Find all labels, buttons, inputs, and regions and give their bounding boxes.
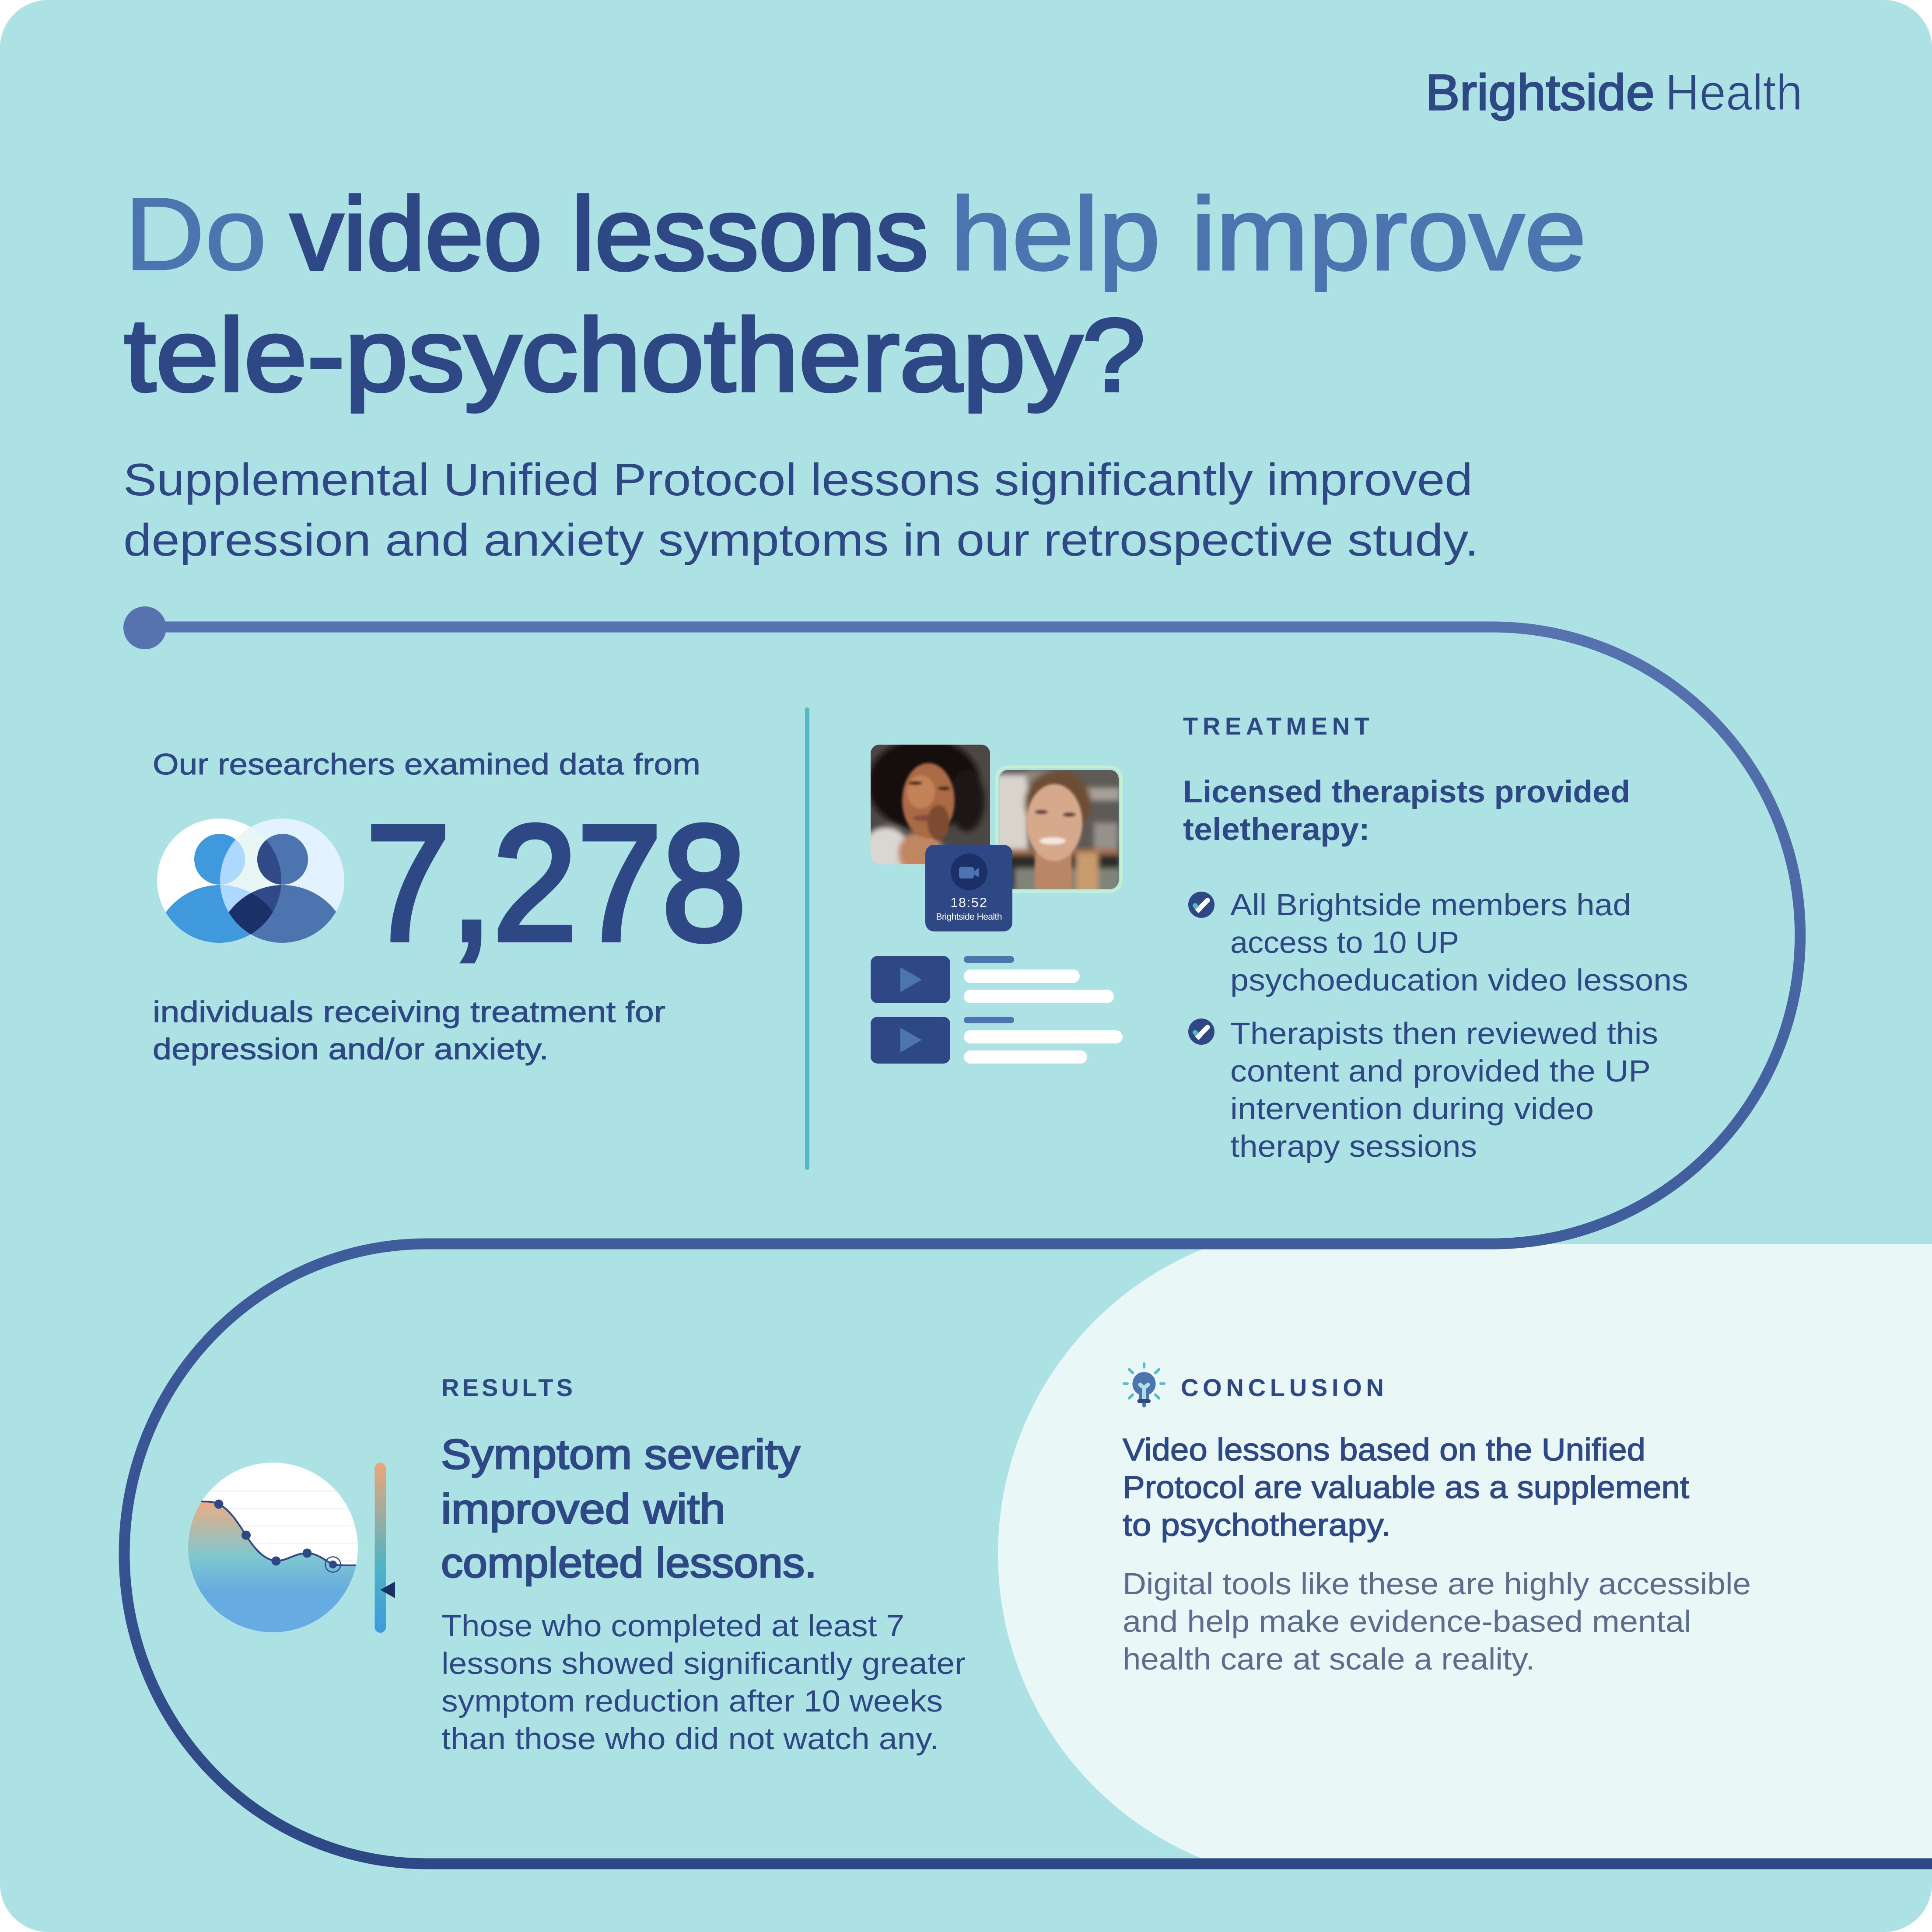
results heading: completed lessons. <box>441 1540 817 1586</box>
treatment heading: Licensed therapists provided <box>1183 774 1630 809</box>
description text <box>153 995 665 1066</box>
intro text: Our researchers examined data from <box>153 748 700 781</box>
video call card <box>925 845 1012 931</box>
title: Do <box>124 176 267 292</box>
results text: Those who completed at least 7 <box>441 1609 904 1643</box>
video call card: Brightside Health <box>936 912 1002 922</box>
video lesson row 1 <box>871 956 1114 1003</box>
treatment label: TREATMENT <box>1183 712 1369 740</box>
conclusion heading <box>1123 1432 1689 1543</box>
conclusion heading: to psychotherapy. <box>1123 1508 1391 1543</box>
bullet 2 <box>1230 1016 1658 1163</box>
conclusion text <box>1123 1567 1751 1676</box>
panel: teletherapy illustration <box>862 738 1123 1064</box>
description text: individuals receiving treatment for <box>153 995 665 1029</box>
subtitle: depression and anxiety symptoms in our retrospective study. <box>123 515 1479 566</box>
video call card: 18:52 <box>950 896 988 910</box>
icon: check 2 <box>1188 1018 1214 1045</box>
conclusion text: and help make evidence-based mental <box>1123 1604 1691 1638</box>
logo: Brightside <box>1425 64 1655 121</box>
bullet 1: psychoeducation video lessons <box>1230 963 1688 997</box>
results heading: Symptom severity <box>441 1431 800 1478</box>
results heading: improved with <box>441 1486 725 1533</box>
results text: lessons showed significantly greater <box>441 1646 966 1680</box>
results text: than those who did not watch any. <box>441 1722 939 1756</box>
description text: depression and/or anxiety. <box>153 1032 549 1066</box>
title <box>124 176 1586 413</box>
conclusion heading: Video lessons based on the Unified <box>1123 1432 1645 1467</box>
panel: study population <box>153 748 746 1066</box>
big number: 7,278 <box>366 791 746 975</box>
photo: patient with border <box>995 767 1121 895</box>
timeline start dot <box>123 606 166 649</box>
icon: light bulb <box>1124 1364 1164 1407</box>
panel: conclusion background <box>998 1250 1327 1858</box>
bullet 2: content and provided the UP <box>1230 1054 1651 1088</box>
conclusion text: Digital tools like these are highly accessible <box>1123 1567 1751 1601</box>
bullet 2: therapy sessions <box>1230 1129 1477 1163</box>
subtitle: Supplemental Unified Protocol lessons significantly improved <box>123 455 1473 505</box>
bullet 2: intervention during video <box>1230 1092 1594 1126</box>
title: help improve <box>950 176 1586 292</box>
conclusion heading: Protocol are valuable as a supplement <box>1123 1470 1689 1505</box>
bullet 1: access to 10 UP <box>1230 925 1459 959</box>
icon: video camera <box>951 854 987 890</box>
bullet 1: All Brightside members had <box>1230 888 1631 922</box>
logo: Health <box>1665 64 1802 121</box>
panel: results <box>441 1374 966 1756</box>
connecting timeline path <box>124 627 1932 1864</box>
panel: conclusion background right side <box>1327 1244 1932 1864</box>
results label: RESULTS <box>441 1374 573 1401</box>
chart: symptom severity curve <box>188 1463 358 1632</box>
photo: therapist <box>871 745 990 864</box>
severity gradient bar <box>374 1463 395 1633</box>
title: tele-psychotherapy? <box>124 298 1145 413</box>
subtitle <box>123 455 1479 566</box>
icon: two overlapping people <box>157 819 344 943</box>
conclusion label: CONCLUSION <box>1181 1374 1384 1401</box>
bullet 2: Therapists then reviewed this <box>1230 1016 1658 1050</box>
results text: symptom reduction after 10 weeks <box>441 1684 943 1718</box>
treatment heading <box>1183 774 1630 847</box>
results heading <box>441 1431 817 1586</box>
bullet 1 <box>1230 888 1688 997</box>
panel: conclusion <box>1123 1364 1751 1676</box>
vertical divider <box>805 707 809 1170</box>
logo <box>1425 64 1802 121</box>
conclusion text: health care at scale a reality. <box>1123 1642 1535 1676</box>
icon: check 1 <box>1188 892 1214 918</box>
title: video lessons <box>290 176 928 292</box>
results text <box>441 1609 966 1756</box>
panel: treatment <box>1183 712 1688 1163</box>
video lesson row 2 <box>871 1017 1123 1064</box>
treatment heading: teletherapy: <box>1183 812 1370 847</box>
